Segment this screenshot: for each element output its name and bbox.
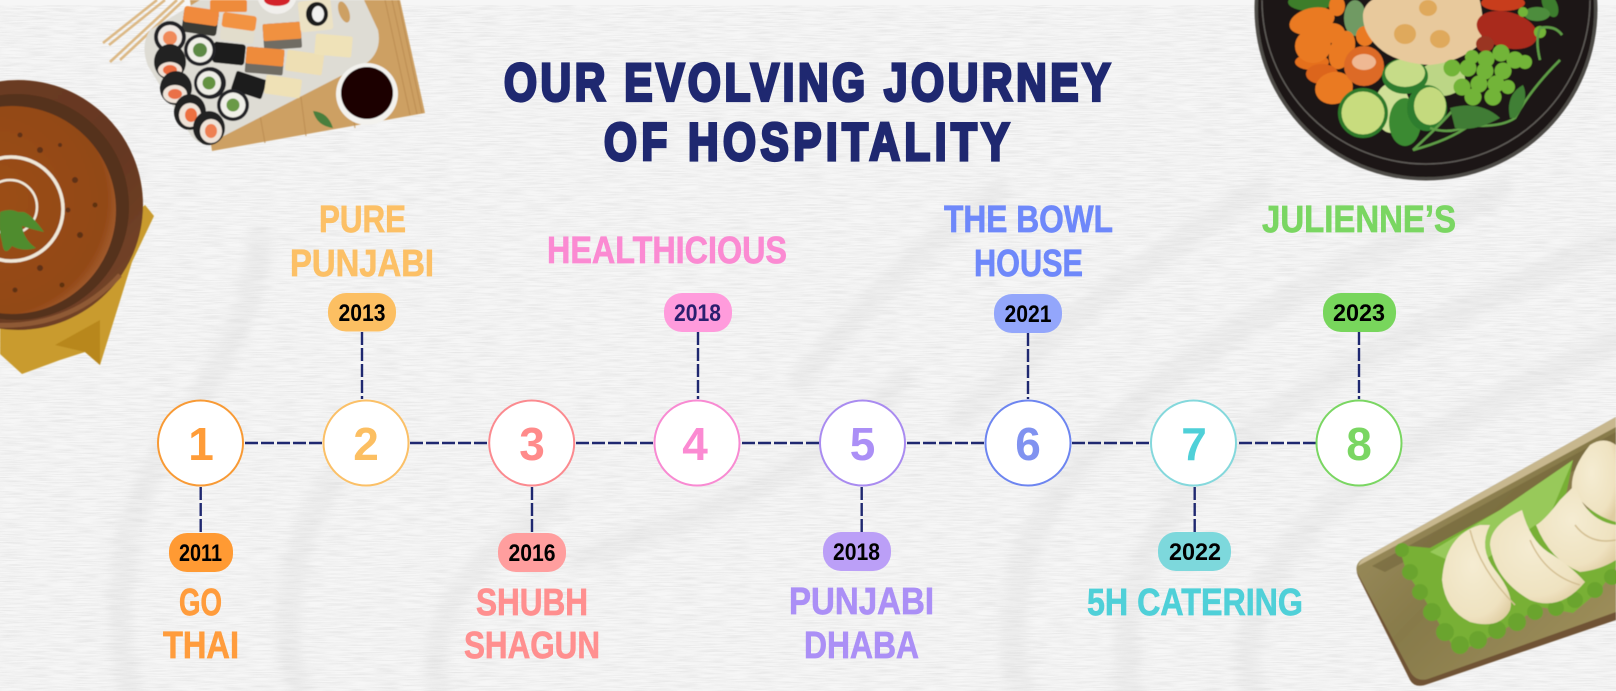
leaves	[1288, 0, 1332, 11]
carrots	[1287, 0, 1374, 108]
milestone 2: Pure Punjabi: PURE	[319, 199, 406, 241]
red ginger dish	[257, 0, 297, 14]
lettuce	[1395, 460, 1616, 654]
milestone 5: Punjabi Dhaba	[789, 400, 934, 667]
tomatoes	[1472, 5, 1542, 55]
title	[504, 54, 1110, 172]
image: dumpling platter	[1357, 417, 1616, 686]
milestone 3: Shubh Shagun	[464, 400, 600, 667]
milestone 8: Julienne's: JULIENNE’S	[1262, 199, 1456, 241]
milestone 3: Shubh Shagun: 3	[519, 418, 545, 470]
milestone 7: 5H Catering: 2022	[1169, 539, 1221, 566]
milestone 6: The Bowl House: 6	[1015, 418, 1041, 470]
milestone 8: Julienne's: 8	[1346, 418, 1372, 470]
nigiri rolls	[181, 0, 353, 99]
milestone 1: Go Thai: 2011	[179, 540, 222, 567]
cucumbers	[1374, 83, 1410, 133]
milestone 1: Go Thai: 1	[188, 418, 214, 470]
milestone 1: Go Thai: THAI	[163, 625, 239, 667]
image: dal bowl	[0, 80, 154, 374]
image: sushi platter	[103, 0, 425, 151]
hummus	[1363, 0, 1483, 65]
milestone 4: Healthicious: HEALTHICIOUS	[547, 230, 787, 272]
chopsticks	[103, 0, 184, 62]
pea shoots	[1413, 27, 1562, 150]
cream swirl	[0, 157, 63, 261]
milestone 4: Healthicious: 2018	[674, 300, 721, 327]
dumplings	[1442, 440, 1616, 624]
bamboo mat	[190, 0, 425, 151]
title: OF HOSPITALITY	[604, 114, 1010, 172]
yellow cloth	[0, 205, 154, 374]
timeline connector	[245, 442, 1316, 444]
milestone 5: Punjabi Dhaba: 2018	[833, 539, 880, 566]
milestone 6: The Bowl House: 2021	[1004, 301, 1052, 328]
image: salad bowl	[1254, 0, 1598, 180]
milestone 3: Shubh Shagun: 2016	[508, 540, 556, 567]
milestone 5: Punjabi Dhaba: 5	[850, 418, 875, 470]
milestone 7: 5H Catering: 7	[1181, 418, 1207, 470]
milestone 6: The Bowl House	[944, 199, 1113, 486]
dal	[0, 106, 116, 314]
milestone 8: Julienne's	[1262, 199, 1456, 486]
milestone 1: Go Thai	[158, 400, 243, 667]
milestone 2: Pure Punjabi: 2	[353, 418, 379, 470]
milestone 7: 5H Catering	[1087, 400, 1303, 624]
milestone 5: Punjabi Dhaba: DHABA	[804, 625, 919, 667]
maki rolls	[154, 21, 249, 145]
milestone 5: Punjabi Dhaba: PUNJABI	[789, 581, 934, 623]
milestone 6: The Bowl House: THE BOWL	[944, 199, 1113, 241]
milestone 2: Pure Punjabi: PUNJABI	[290, 243, 434, 285]
leaf	[313, 111, 333, 128]
milestone 2: Pure Punjabi	[290, 199, 434, 486]
milestone 3: Shubh Shagun: SHUBH	[476, 582, 588, 624]
coriander garnish	[0, 210, 44, 251]
wooden bowl	[0, 80, 143, 330]
milestone 4: Healthicious: 4	[682, 418, 708, 470]
milestone 2: Pure Punjabi: 2013	[338, 300, 386, 327]
peas	[1444, 7, 1546, 106]
cutting board	[144, 0, 379, 143]
milestone 3: Shubh Shagun: SHAGUN	[464, 625, 600, 667]
soy sauce	[336, 63, 398, 125]
title: OUR EVOLVING JOURNEY	[504, 54, 1110, 113]
black bowl	[1254, 0, 1598, 180]
plate	[1357, 417, 1616, 686]
milestone 6: The Bowl House: HOUSE	[974, 243, 1083, 285]
milestone 7: 5H Catering: 5H CATERING	[1087, 582, 1303, 624]
milestone 1: Go Thai: GO	[179, 582, 222, 624]
milestone 8: Julienne's: 2023	[1333, 300, 1385, 327]
milestone 4: Healthicious	[547, 230, 787, 486]
